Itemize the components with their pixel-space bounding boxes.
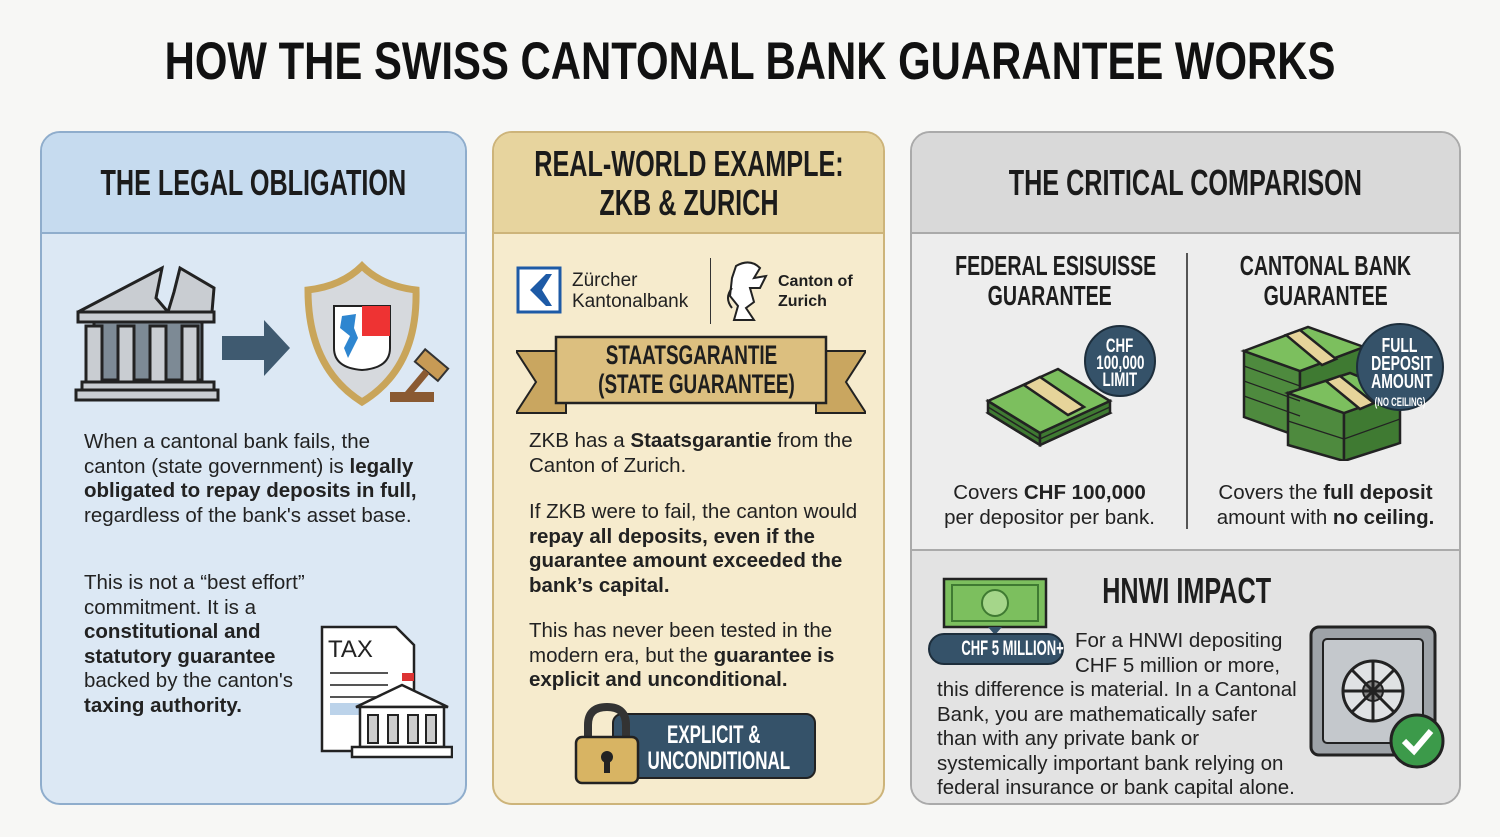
heading: legal obligation: THE LEGAL OBLIGATION: [101, 162, 406, 203]
column: cantonal: CANTONAL BANK: [1240, 250, 1411, 281]
text block: obligation: obligated to repay deposits in full,: [84, 479, 417, 502]
column: cantonal: amount with no ceiling.: [1217, 506, 1434, 528]
panel: real-world example: [492, 131, 885, 805]
section: HNWI impact: this difference is material. In a Cantonal: [937, 678, 1297, 701]
section: HNWI impact: Bank, you are mathematically safer: [937, 702, 1257, 726]
logos: ZKB and Canton: Zurich: [778, 293, 827, 310]
banner: staatsgarantie: [516, 336, 866, 414]
badge: explicit & unconditional: [574, 703, 816, 784]
column: cantonal: [1217, 250, 1444, 528]
text block: constitutional: taxing authority.: [84, 694, 242, 716]
logos: ZKB and Canton: Zürcher: [572, 270, 637, 291]
badge: CHF 5 million: CHF 5 MILLION+: [961, 637, 1064, 660]
column: cantonal: FULL: [1382, 335, 1418, 357]
panel: real-world example: modern era, but the guarantee is: [529, 644, 834, 666]
section: HNWI impact: than with any private bank or: [937, 727, 1199, 750]
section: HNWI impact: systemically important bank relying on: [937, 752, 1283, 774]
heading: critical comparison: THE CRITICAL COMPARISON: [1009, 162, 1362, 203]
heading: ZKB & Zurich: ZKB & ZURICH: [599, 182, 778, 222]
column: federal: [944, 250, 1156, 528]
text block: constitutional: [84, 571, 305, 716]
column: cantonal: AMOUNT: [1371, 371, 1433, 393]
column: federal: FEDERAL ESISUISSE: [955, 250, 1156, 281]
column: federal: CHF: [1106, 336, 1134, 357]
heading: legal obligation: [42, 133, 465, 234]
column: federal: LIMIT: [1103, 370, 1137, 391]
column: cantonal: Covers the full deposit: [1218, 481, 1433, 504]
section: HNWI impact: HNWI IMPACT: [1103, 570, 1271, 611]
panel: real-world example: This has never been tested in the: [529, 619, 832, 642]
text block: constitutional: statutory guarantee: [84, 644, 275, 668]
text block: constitutional: constitutional and: [84, 620, 261, 643]
panel: real-world example: explicit and unconditional.: [529, 668, 788, 691]
column: federal: per depositor per bank.: [944, 506, 1155, 528]
section: HNWI impact: CHF 5 million or more,: [1075, 654, 1280, 676]
section: HNWI impact: For a HNWI depositing: [1075, 629, 1282, 652]
text block: obligation: canton (state government) is legally: [84, 454, 413, 478]
text block: obligation: [84, 430, 417, 526]
column: cantonal: DEPOSIT: [1371, 353, 1433, 375]
text block: obligation: regardless of the bank's asset base.: [84, 504, 412, 526]
panel: real-world example: bank’s capital.: [529, 574, 670, 596]
column: federal: GUARANTEE: [987, 280, 1112, 311]
banner: staatsgarantie: STAATSGARANTIE: [605, 340, 777, 370]
heading: ZKB & Zurich: REAL-WORLD EXAMPLE:: [534, 142, 843, 184]
column: cantonal: GUARANTEE: [1263, 280, 1388, 311]
logos: ZKB and Canton: [516, 258, 853, 324]
icon: banknote: [942, 578, 1048, 633]
panel: real-world example: If ZKB were to fail, the canton would: [529, 500, 857, 523]
badge: CHF 5 million: [928, 633, 1064, 665]
column: federal: 100,000: [1096, 353, 1144, 374]
section: HNWI impact: [912, 549, 1463, 807]
panel: critical comparison: [910, 131, 1461, 805]
heading: ZKB & Zurich: [494, 133, 883, 234]
logos: ZKB and Canton: Canton of: [778, 273, 853, 290]
column: cantonal: (NO CEILING): [1375, 395, 1425, 409]
text block: constitutional: backed by the canton's: [84, 669, 293, 692]
title: HOW THE SWISS CANTONAL BANK GUARANTEE WORKS: [165, 32, 1335, 91]
panel: real-world example: repay all deposits, even if the: [529, 524, 815, 548]
badge: explicit & unconditional: UNCONDITIONAL: [648, 747, 790, 775]
logos: ZKB and Canton: Kantonalbank: [572, 291, 688, 312]
text block: ZKB: [529, 429, 853, 476]
column: federal: Covers CHF 100,000: [953, 481, 1146, 504]
text block: ZKB: Canton of Zurich.: [529, 454, 686, 476]
panel: real-world example: guarantee amount exceeded the: [529, 549, 842, 572]
text block: ZKB: ZKB has a Staatsgarantie from the: [529, 429, 853, 452]
section: HNWI impact: federal insurance or bank capital alone.: [937, 776, 1295, 799]
icon: vault: [1310, 626, 1444, 768]
panel: legal obligation: [40, 131, 467, 805]
text block: constitutional: commitment. It is a: [84, 596, 256, 618]
badge: explicit & unconditional: EXPLICIT &: [667, 721, 761, 749]
text block: obligation: When a cantonal bank fails, the: [84, 430, 370, 453]
heading: critical comparison: [912, 133, 1459, 234]
text block: constitutional: This is not a “best effort”: [84, 571, 305, 594]
icon: broken bank to shield: [74, 261, 450, 406]
icon: tax document: TAX: [328, 636, 373, 663]
icon: tax document: [320, 626, 453, 758]
banner: staatsgarantie: (STATE GUARANTEE): [598, 369, 795, 399]
